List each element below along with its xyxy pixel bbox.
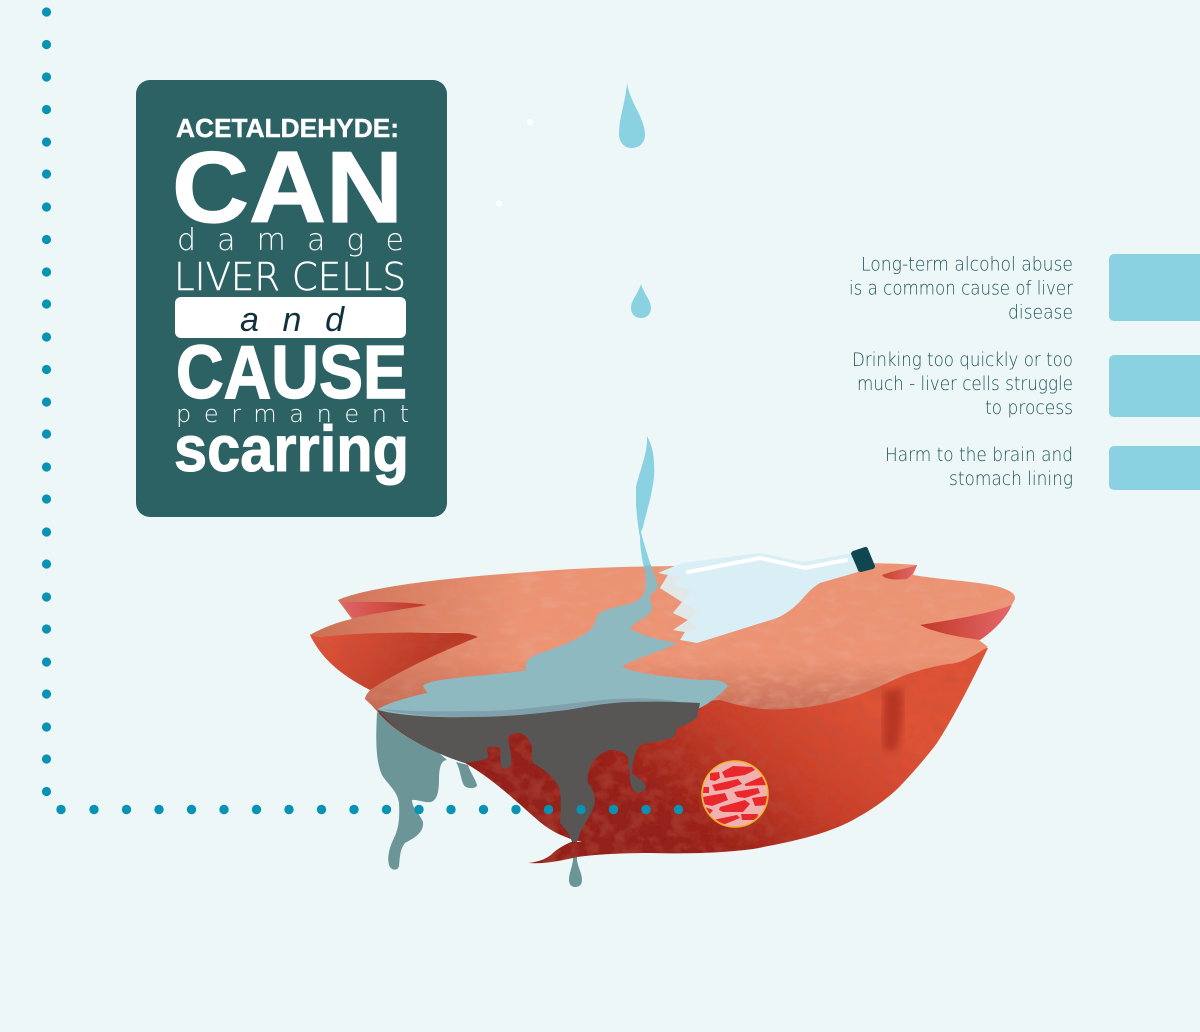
text: causes list: stomach lining — [949, 469, 1073, 490]
text: and: and — [240, 301, 345, 339]
teal drips behind liver — [376, 712, 582, 887]
text: causes list: disease — [1008, 302, 1073, 324]
text: causes list: to process — [985, 398, 1073, 419]
heading: can: CAN — [172, 132, 403, 244]
dotted vertical line — [42, 7, 51, 796]
blue-gray river — [378, 565, 728, 720]
icon: liver cells circle — [702, 761, 768, 827]
text: liver cells: LIVER CELLS — [174, 255, 406, 299]
text: causes list: Drinking too quickly or too — [852, 350, 1073, 371]
gray scar — [378, 702, 700, 842]
left shading on top surface — [310, 573, 520, 711]
icon: small drop — [631, 284, 651, 318]
legend bars — [1109, 254, 1200, 490]
bottle broken edge — [660, 575, 698, 633]
text: causes list — [849, 254, 1073, 490]
text: causes list: Long-term alcohol abuse — [861, 254, 1073, 276]
bottle cap — [851, 547, 875, 572]
left flap — [310, 632, 478, 690]
text: permanent: permanent — [176, 400, 409, 428]
bottle — [658, 547, 875, 643]
text: damage: damage — [177, 223, 404, 258]
bottle body — [658, 553, 858, 643]
crescent: upper left — [340, 602, 427, 618]
stream above liver — [636, 436, 654, 568]
crescent: top right — [882, 565, 917, 580]
dark stain — [883, 688, 903, 751]
icon: large drop — [619, 83, 645, 148]
heading: scarring: scarring — [174, 412, 409, 485]
text: causes list: is a common cause of liver — [849, 278, 1073, 300]
title card — [136, 80, 447, 517]
heading: acetaldehyde: ACETALDEHYDE: — [176, 115, 399, 143]
crescent: right — [920, 605, 1012, 640]
text: causes list: Harm to the brain and — [885, 445, 1073, 466]
heading: cause: CAUSE — [176, 330, 407, 414]
white sparkle dots — [496, 119, 533, 206]
illustration: damaged liver — [56, 436, 1015, 887]
river lower rim — [380, 698, 680, 717]
crescent: left flap shadow — [400, 633, 478, 643]
text: causes list: much - liver cells struggle — [857, 374, 1073, 395]
dotted horizontal line — [56, 805, 683, 814]
white pill — [175, 297, 406, 338]
liver lower body — [365, 640, 988, 863]
liver top surface — [310, 563, 1015, 716]
bottle highlight — [688, 558, 846, 572]
